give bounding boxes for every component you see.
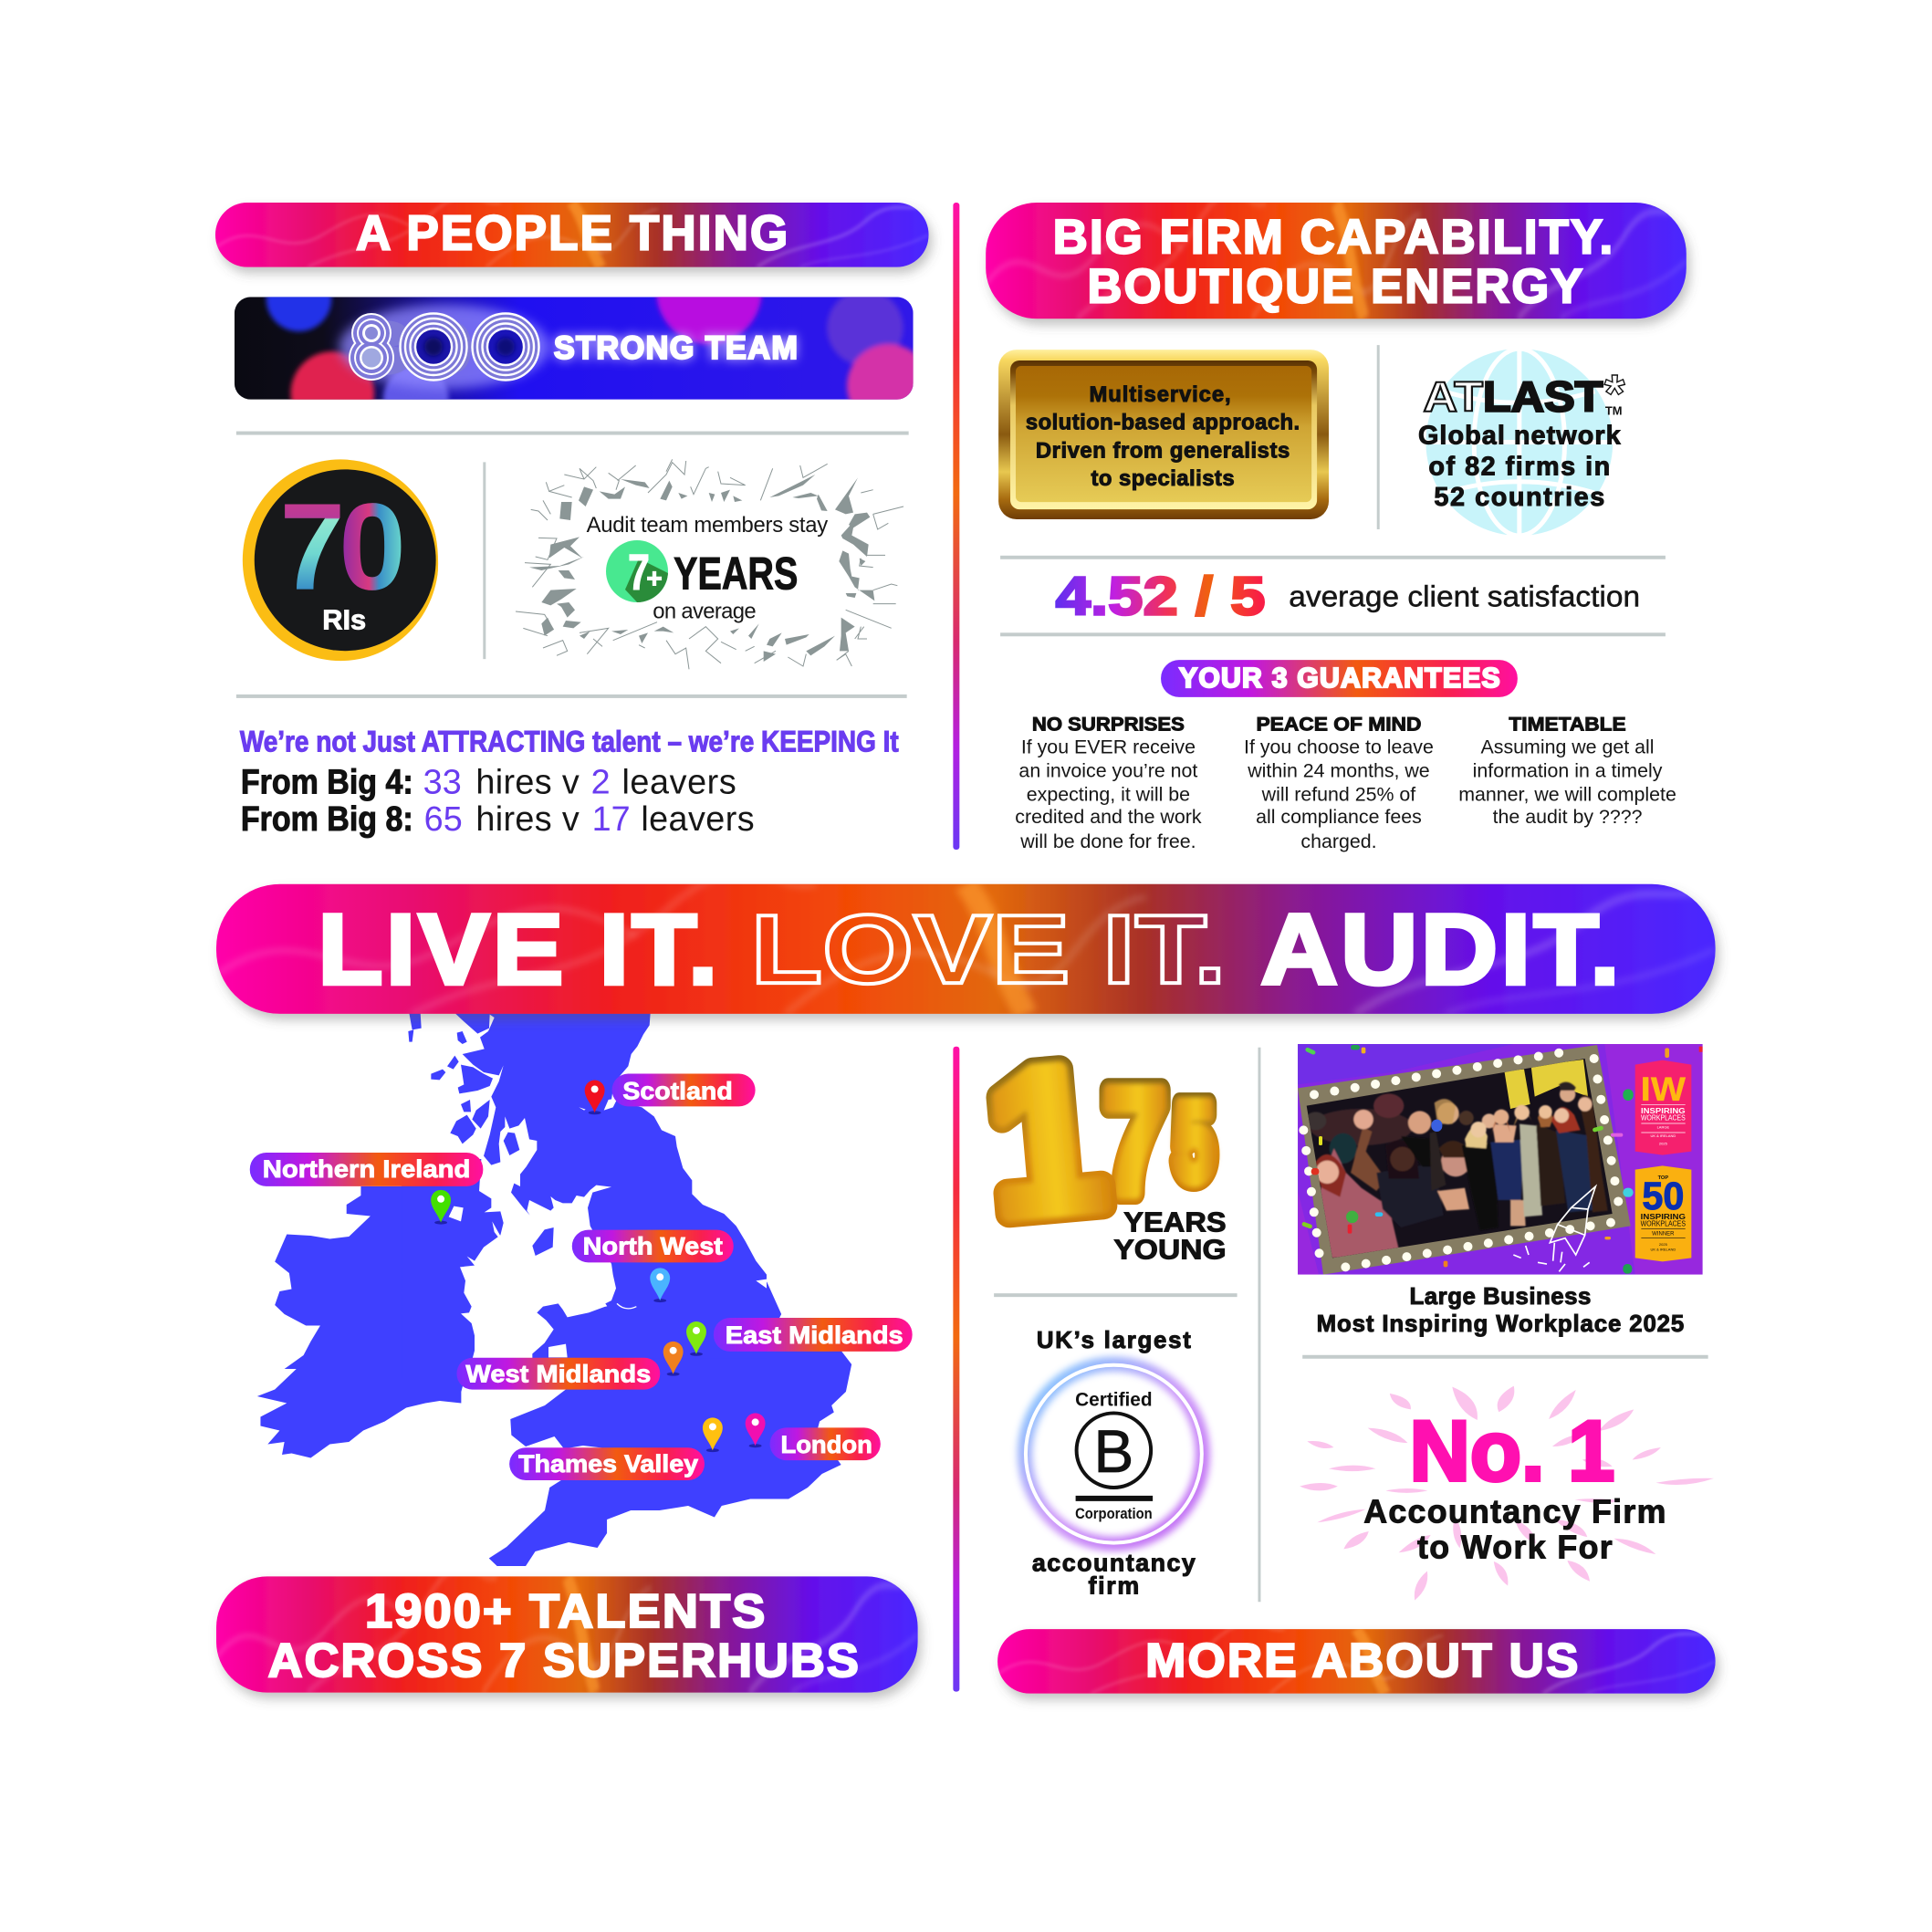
banner: Live it. Love it. Audit. xyxy=(216,871,1716,1014)
Top 50 award ribbon: UK & IRELAND xyxy=(1650,1248,1676,1252)
Big 4 row: 2 xyxy=(591,763,611,801)
Top 50 award ribbon: WINNER xyxy=(1652,1232,1675,1238)
accountancy firm xyxy=(1032,1549,1196,1599)
photo panel: awards celebration xyxy=(1298,1044,1703,1275)
guarantee: peace of mind: within 24 months, we xyxy=(1247,759,1430,781)
guarantee: timetable: TIMETABLE xyxy=(1509,714,1626,736)
network text: 52 countries xyxy=(1434,483,1604,512)
award caption: Large Business xyxy=(1410,1284,1591,1310)
banner: Big firm capability: BIG FIRM CAPABILITY. xyxy=(1053,211,1614,265)
banner: 1900+ talents: ACROSS 7 SUPERHUBS xyxy=(268,1634,861,1687)
green 7+ badge: + xyxy=(646,564,663,594)
gold plate: Multiservice, xyxy=(1090,382,1231,407)
Big 4 row: hires v xyxy=(475,763,580,801)
gold balloon 175: 7 xyxy=(1103,1057,1166,1225)
lightbulb frame xyxy=(1303,1050,1622,1267)
UK's largest: UK’s largest xyxy=(1037,1328,1191,1353)
Big 4 row: 33 xyxy=(423,763,462,801)
IW award ribbon: WORKPLACES xyxy=(1641,1113,1686,1122)
cracked wall frame with 7+ years xyxy=(516,459,903,669)
label: East Midlands: East Midlands xyxy=(726,1321,903,1349)
accountancy firm to work for: to Work For xyxy=(1417,1530,1613,1566)
Top 50 award ribbon: 2025 xyxy=(1659,1242,1668,1247)
Big 8 row: hires v xyxy=(475,800,580,839)
label: North West xyxy=(572,1230,734,1262)
map pin: Thames Valley xyxy=(703,1417,723,1452)
YEARS: YEARS xyxy=(674,548,798,600)
badge: 70 RIs: 0 xyxy=(339,478,406,616)
cracks xyxy=(516,459,903,669)
Atlast logo: AT xyxy=(1423,373,1484,421)
Big 8 row: leavers xyxy=(641,800,755,839)
gold plate: solution-based approach. xyxy=(1026,411,1300,435)
guarantee: timetable: information in a timely xyxy=(1473,759,1663,781)
banner: Live it. Love it. Audit.: AUDIT. xyxy=(1260,894,1623,1006)
label: Scotland: Scotland xyxy=(622,1077,733,1104)
label: Northern Ireland xyxy=(250,1153,483,1186)
years young: YOUNG xyxy=(1113,1233,1227,1265)
award caption: Most Inspiring Workplace 2025 xyxy=(1317,1311,1684,1337)
banner: 1900+ talents xyxy=(216,1565,918,1693)
map pin: London xyxy=(746,1413,766,1447)
banner: A People Thing xyxy=(215,196,929,267)
B Corp badge: Certified xyxy=(1075,1389,1153,1410)
label: Thames Valley: Thames Valley xyxy=(518,1450,698,1478)
map pin: North West xyxy=(650,1268,670,1302)
gold plate: to specialists xyxy=(1091,466,1235,491)
on average: on average xyxy=(653,599,757,623)
label: North West: North West xyxy=(583,1232,723,1259)
accountancy firm to work for xyxy=(1363,1494,1666,1566)
accountancy firm: firm xyxy=(1089,1572,1139,1599)
Big 4 row: From Big 4: xyxy=(241,763,413,801)
Big 4 row: leavers xyxy=(621,763,736,801)
IW award ribbon xyxy=(1635,1060,1691,1155)
Atlast logo: LAST xyxy=(1483,373,1603,421)
guarantees pill: YOUR 3 GUARANTEES xyxy=(1179,662,1501,694)
confetti xyxy=(1301,1045,1703,1274)
Top 50 award ribbon xyxy=(1635,1165,1691,1261)
map: UK and Ireland xyxy=(257,1013,851,1566)
client satisfaction score xyxy=(1056,565,1640,626)
years young xyxy=(1113,1206,1227,1265)
divider bar upper xyxy=(953,203,959,850)
network text: Global network xyxy=(1418,421,1622,450)
green 7+ badge xyxy=(606,540,668,602)
label: West Midlands: West Midlands xyxy=(465,1361,651,1388)
badge: 70 RIs: 7 xyxy=(280,478,345,616)
guarantee: peace of mind: If you choose to leave xyxy=(1244,736,1434,758)
Top 50 award ribbon: TOP xyxy=(1658,1175,1668,1181)
Scotland, northern England, north-east Ireland and islands xyxy=(402,1013,767,1378)
guarantee: no surprises xyxy=(1015,714,1202,852)
guarantee: peace of mind xyxy=(1244,714,1434,852)
years young: YEARS xyxy=(1123,1206,1227,1238)
award caption xyxy=(1317,1284,1684,1337)
banner: More about us xyxy=(997,1623,1716,1694)
Atlast logo xyxy=(1423,365,1625,423)
badge: 70 RIs: RIs xyxy=(322,603,366,635)
Atlast logo: TM xyxy=(1605,404,1623,418)
IW award ribbon: IW xyxy=(1641,1070,1687,1108)
panel: 800 strong team xyxy=(234,297,914,400)
label: East Midlands xyxy=(714,1318,913,1352)
IW award ribbon: LARGE xyxy=(1657,1125,1669,1130)
guarantee: no surprises: credited and the work xyxy=(1015,806,1202,828)
Big 8 row: From Big 8: xyxy=(241,800,413,839)
No. 1: No. 1 xyxy=(1410,1403,1614,1499)
network text: of 82 firms in xyxy=(1428,452,1610,481)
label: Scotland xyxy=(612,1074,756,1106)
map pin: East Midlands xyxy=(686,1321,706,1356)
badge: 70 RIs xyxy=(243,459,439,661)
audit text top: Audit team members stay xyxy=(587,513,828,538)
retention heading: We’re not Just ATTRACTING talent – we’re KEEPING It xyxy=(240,725,899,758)
gold balloon 175: 5 xyxy=(1174,1079,1215,1204)
client satisfaction score: 4.52 / 5 xyxy=(1056,565,1265,626)
banner: 1900+ talents: 1900+ TALENTS xyxy=(365,1584,768,1637)
banner: A People Thing: A PEOPLE THING xyxy=(356,206,789,261)
guarantee: timetable: Assuming we get all xyxy=(1481,736,1655,758)
IW award ribbon: INSPIRING xyxy=(1641,1107,1686,1115)
B Corp badge xyxy=(1025,1364,1203,1544)
Atlast logo: * xyxy=(1604,365,1625,423)
globe xyxy=(1426,349,1613,536)
petals burst xyxy=(1300,1386,1714,1601)
label: London xyxy=(770,1427,881,1460)
guarantee: timetable xyxy=(1458,714,1676,828)
Big 8 row xyxy=(241,800,755,839)
IW award ribbon: 2025 xyxy=(1659,1141,1668,1145)
guarantee: no surprises: If you EVER receive xyxy=(1021,736,1196,758)
Big 8 row: 17 xyxy=(592,800,631,839)
guarantee: no surprises: will be done for free. xyxy=(1019,830,1196,852)
gold balloon 175: 1 xyxy=(981,1023,1112,1258)
Top 50 award ribbon: 50 xyxy=(1642,1175,1684,1218)
network text xyxy=(1418,421,1622,512)
map pin: Scotland xyxy=(585,1081,605,1114)
label: Northern Ireland: Northern Ireland xyxy=(263,1155,470,1183)
strong team label: STRONG TEAM xyxy=(554,330,797,366)
guarantee: peace of mind: all compliance fees xyxy=(1256,806,1422,828)
green 7+ badge: 7 xyxy=(628,543,650,600)
gold balloon 175 xyxy=(981,1023,1215,1258)
client satisfaction score: average client satisfaction xyxy=(1289,579,1640,612)
guarantee: timetable: manner, we will complete xyxy=(1458,783,1676,805)
guarantee: no surprises: an invoice you’re not xyxy=(1018,759,1197,781)
map pin: Northern Ireland xyxy=(431,1190,451,1225)
divider bar lower xyxy=(953,1047,959,1692)
guarantee: peace of mind: charged. xyxy=(1300,830,1377,852)
accountancy firm to work for: Accountancy Firm xyxy=(1363,1494,1666,1530)
Top 50 award ribbon: WORKPLACES xyxy=(1641,1219,1686,1227)
banner: Big firm capability: BOUTIQUE ENERGY xyxy=(1088,259,1584,313)
Big 4 row xyxy=(241,763,736,801)
guarantee: no surprises: NO SURPRISES xyxy=(1032,714,1185,736)
Ireland west and southern England xyxy=(257,1186,851,1566)
Big 8 row: 65 xyxy=(424,800,463,839)
B Corp badge: Corporation xyxy=(1075,1506,1153,1522)
strong team label: STRONG TEAM xyxy=(554,330,799,366)
guarantee: timetable: the audit by ???? xyxy=(1493,806,1643,828)
banner: Live it. Love it. Audit.: LOVE IT. xyxy=(751,894,1227,1004)
Atlast globe and network xyxy=(1418,349,1625,536)
big number 800 xyxy=(339,305,549,391)
label: London: London xyxy=(780,1431,872,1458)
big number 800: 800 xyxy=(350,305,538,391)
B Corp badge: B xyxy=(1093,1418,1133,1485)
rocket doodle xyxy=(1513,1186,1595,1271)
guarantee: no surprises: expecting, it will be xyxy=(1027,783,1190,805)
Top 50 award ribbon: INSPIRING xyxy=(1641,1213,1686,1221)
accountancy firm: accountancy xyxy=(1032,1549,1196,1576)
banner: Big firm capability xyxy=(986,191,1687,319)
guarantee: peace of mind: PEACE OF MIND xyxy=(1256,714,1421,736)
banner: More about us: MORE ABOUT US xyxy=(1145,1634,1580,1687)
gold plate: Driven from generalists xyxy=(1036,438,1290,463)
banner: Live it. Love it. Audit.: LIVE IT. xyxy=(318,894,721,1006)
map pin: West Midlands xyxy=(663,1342,684,1376)
gold plate xyxy=(998,350,1329,519)
IW award ribbon: UK & IRELAND xyxy=(1650,1133,1676,1138)
guarantee: peace of mind: will refund 25% of xyxy=(1261,783,1415,805)
